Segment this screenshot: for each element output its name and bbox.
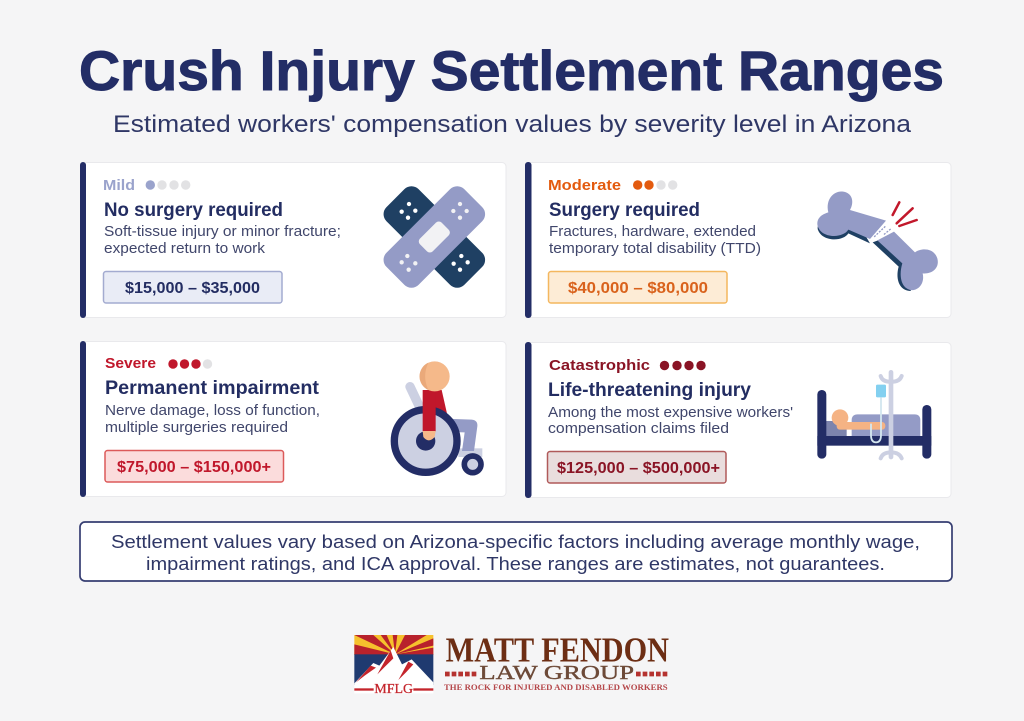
icon: broken bone xyxy=(817,191,938,291)
severity dots: severe xyxy=(168,359,212,369)
description: severe xyxy=(105,403,320,436)
callout: disclaimer xyxy=(80,522,952,581)
value range: severe xyxy=(105,450,284,482)
severity dots: moderate xyxy=(633,180,677,190)
heading: moderate: Surgery required xyxy=(549,200,700,221)
description: moderate xyxy=(549,224,761,257)
severity label: catastrophic: Catastrophic xyxy=(549,357,650,374)
title: Crush Injury Settlement Ranges xyxy=(79,39,944,102)
panel: mild xyxy=(80,162,506,318)
logo emblem xyxy=(354,635,433,697)
value range: severe: $75,000 – $150,000+ xyxy=(117,459,271,476)
description: moderate: temporary total disability (TTD) xyxy=(549,241,761,257)
value range: catastrophic: $125,000 – $500,000+ xyxy=(557,460,720,477)
panel: severe xyxy=(80,341,506,497)
logo wordmark: THE ROCK FOR INJURED AND DISABLED WORKERS xyxy=(444,682,668,692)
description: severe: Nerve damage, loss of function, xyxy=(105,403,320,419)
value range: mild xyxy=(104,272,282,303)
severity label: severe: Severe xyxy=(105,355,156,372)
icon: patient in hospital bed xyxy=(817,370,931,459)
subtitle: Estimated workers' compensation values by severity level in Arizona xyxy=(113,111,912,138)
heading: severe: Permanent impairment xyxy=(105,378,320,399)
heading: mild: No surgery required xyxy=(104,200,283,221)
value range: catastrophic xyxy=(548,452,726,483)
callout: disclaimer: Settlement values vary based on Arizona-specific factors including average monthly wage, xyxy=(111,532,920,552)
callout: disclaimer: impairment ratings, and ICA approval. These ranges are estimates, not guarantees. xyxy=(146,554,885,574)
description: mild: Soft-tissue injury or minor fracture; xyxy=(104,224,341,240)
panel: moderate xyxy=(525,162,951,318)
value range: moderate: $40,000 – $80,000 xyxy=(568,280,708,297)
description: catastrophic: Among the most expensive workers' xyxy=(548,405,793,421)
value range: mild: $15,000 – $35,000 xyxy=(125,280,260,297)
description: mild xyxy=(104,224,341,257)
description: mild: expected return to work xyxy=(104,241,266,257)
description: catastrophic xyxy=(548,405,793,437)
value range: moderate xyxy=(548,272,727,303)
severity dots: catastrophic xyxy=(660,361,706,370)
description: moderate: Fractures, hardware, extended xyxy=(549,224,756,240)
logo wordmark: LAW GROUP xyxy=(479,662,634,684)
logo: Matt Fendon Law Group xyxy=(354,632,669,697)
logo emblem: MFLG xyxy=(374,682,413,697)
logo wordmark xyxy=(444,632,669,692)
severity label: mild: Mild xyxy=(103,177,135,194)
logo wordmark: MATT FENDON xyxy=(446,632,669,670)
heading: catastrophic: Life-threatening injury xyxy=(548,380,751,401)
icon: person in wheelchair xyxy=(394,361,482,473)
description: catastrophic: compensation claims filed xyxy=(548,421,729,437)
severity dots: mild xyxy=(146,180,190,190)
icon: crossed bandages xyxy=(379,182,489,292)
severity label: moderate: Moderate xyxy=(548,177,621,194)
description: severe: multiple surgeries required xyxy=(105,420,288,436)
panel: catastrophic xyxy=(525,342,951,498)
